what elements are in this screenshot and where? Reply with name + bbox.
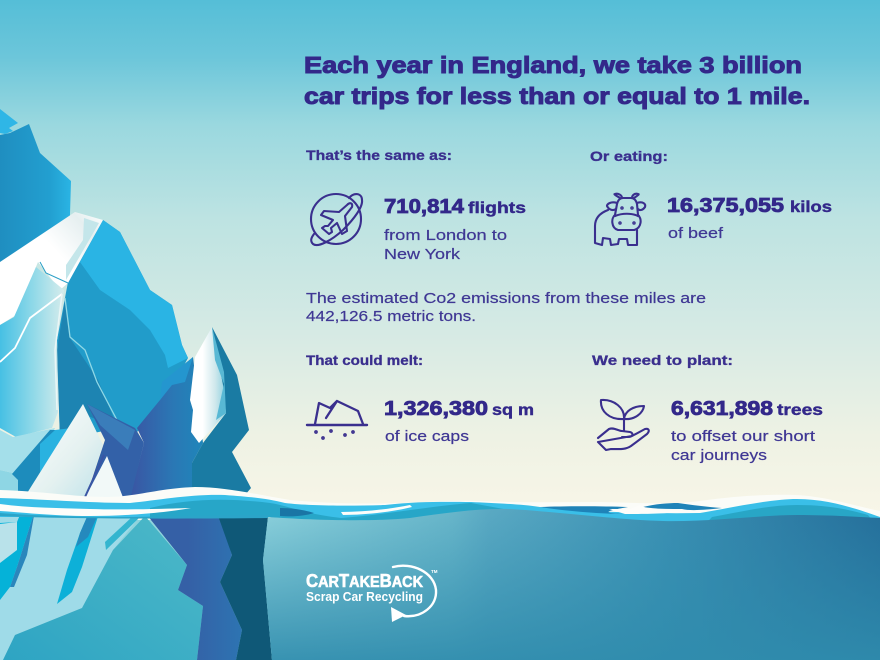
stat: trees bbox=[671, 397, 823, 464]
stat: flights bbox=[384, 195, 526, 263]
stat: flights: flights bbox=[468, 200, 526, 217]
stat: beef: 16,375,055 bbox=[667, 194, 784, 217]
small peak bbox=[24, 404, 103, 498]
teal underwater ice bbox=[3, 516, 203, 660]
small cyan streak bbox=[105, 517, 140, 550]
white glint bbox=[609, 505, 682, 514]
dark wave left bbox=[280, 508, 314, 516]
water surface waves bbox=[0, 487, 880, 530]
subheading: same as: That’s the same as: bbox=[306, 148, 452, 163]
stat: trees: 6,631,898 bbox=[671, 397, 773, 420]
icon: plant in hand bbox=[598, 400, 649, 450]
lower waterline strip bbox=[0, 513, 268, 519]
stat: trees: car journeys bbox=[671, 448, 767, 464]
lower left ice bbox=[0, 428, 55, 473]
dark blue left shadow bbox=[57, 300, 118, 440]
upper peak bbox=[0, 124, 71, 280]
stat: flights: from London to bbox=[384, 228, 507, 244]
logo: Scrap Car Recycling bbox=[306, 590, 423, 604]
subheading: need to plant: We need to plant: bbox=[592, 353, 733, 368]
crack dark bbox=[40, 262, 68, 283]
white foam band bbox=[0, 487, 880, 530]
stat: ice caps bbox=[384, 397, 534, 445]
sky background bbox=[0, 0, 880, 520]
emissions text: The estimated Co2 emissions from these miles are bbox=[306, 291, 706, 307]
right white spike bbox=[190, 327, 226, 443]
stat: flights: New York bbox=[384, 247, 461, 263]
white snow cap bbox=[0, 212, 103, 325]
logo: TM bbox=[431, 569, 438, 574]
wave details bbox=[280, 503, 722, 516]
cyan wave band bbox=[0, 495, 880, 530]
right dark ridge bbox=[192, 327, 251, 497]
logo bbox=[306, 566, 438, 622]
left cyan streak bbox=[0, 510, 35, 600]
stat: flights: 710,814 bbox=[384, 195, 465, 218]
lower blue facet bbox=[12, 430, 70, 495]
subheading: or eating: Or eating: bbox=[590, 149, 668, 164]
heading bbox=[304, 52, 810, 109]
stat: beef bbox=[667, 194, 832, 242]
darkest underwater column bbox=[216, 510, 272, 660]
heading: Each year in England, we take 3 billion bbox=[304, 52, 802, 78]
icon: cow bbox=[595, 194, 645, 245]
emissions text bbox=[306, 291, 706, 325]
cap light facet bbox=[66, 218, 99, 280]
light underwater ice bbox=[0, 510, 145, 660]
bright blue face bbox=[80, 220, 188, 368]
white crest left bbox=[0, 504, 191, 516]
teal wave band right bbox=[700, 505, 880, 530]
stat: trees: to offset our short bbox=[671, 429, 815, 445]
white crest middle bbox=[341, 505, 412, 515]
crack line bbox=[65, 298, 118, 422]
stat: ice caps: 1,326,380 bbox=[384, 397, 488, 420]
central shaded facet bbox=[85, 404, 144, 500]
blue underwater column bbox=[143, 510, 242, 660]
iceberg below water bbox=[0, 510, 272, 660]
iceberg above water bbox=[0, 109, 251, 500]
dark wave mid bbox=[540, 506, 628, 514]
left light ice face bbox=[0, 267, 64, 437]
sea body bbox=[263, 509, 880, 660]
stat: ice caps: sq m bbox=[492, 402, 534, 419]
heading: car trips for less than or equal to 1 mile. bbox=[304, 83, 810, 109]
teal wave band left bbox=[150, 500, 520, 530]
stat: beef: kilos bbox=[790, 199, 832, 216]
main blue face bbox=[57, 220, 188, 440]
peak highlight bbox=[0, 109, 18, 134]
icon: plane and globe bbox=[311, 194, 362, 245]
emissions text: 442,126.5 metric tons. bbox=[306, 309, 476, 325]
central deep blue column bbox=[130, 357, 203, 497]
logo: CARTAKEBACK bbox=[306, 571, 424, 591]
icon: melting ice bbox=[307, 401, 367, 439]
stat: ice caps: of ice caps bbox=[385, 429, 469, 445]
stat: trees: trees bbox=[777, 402, 823, 419]
ridge line bbox=[0, 294, 62, 362]
subheading: could melt: That could melt: bbox=[306, 353, 423, 368]
dark wave right bbox=[643, 503, 722, 510]
stat: beef: of beef bbox=[668, 226, 724, 242]
middle cyan streak bbox=[57, 510, 100, 604]
